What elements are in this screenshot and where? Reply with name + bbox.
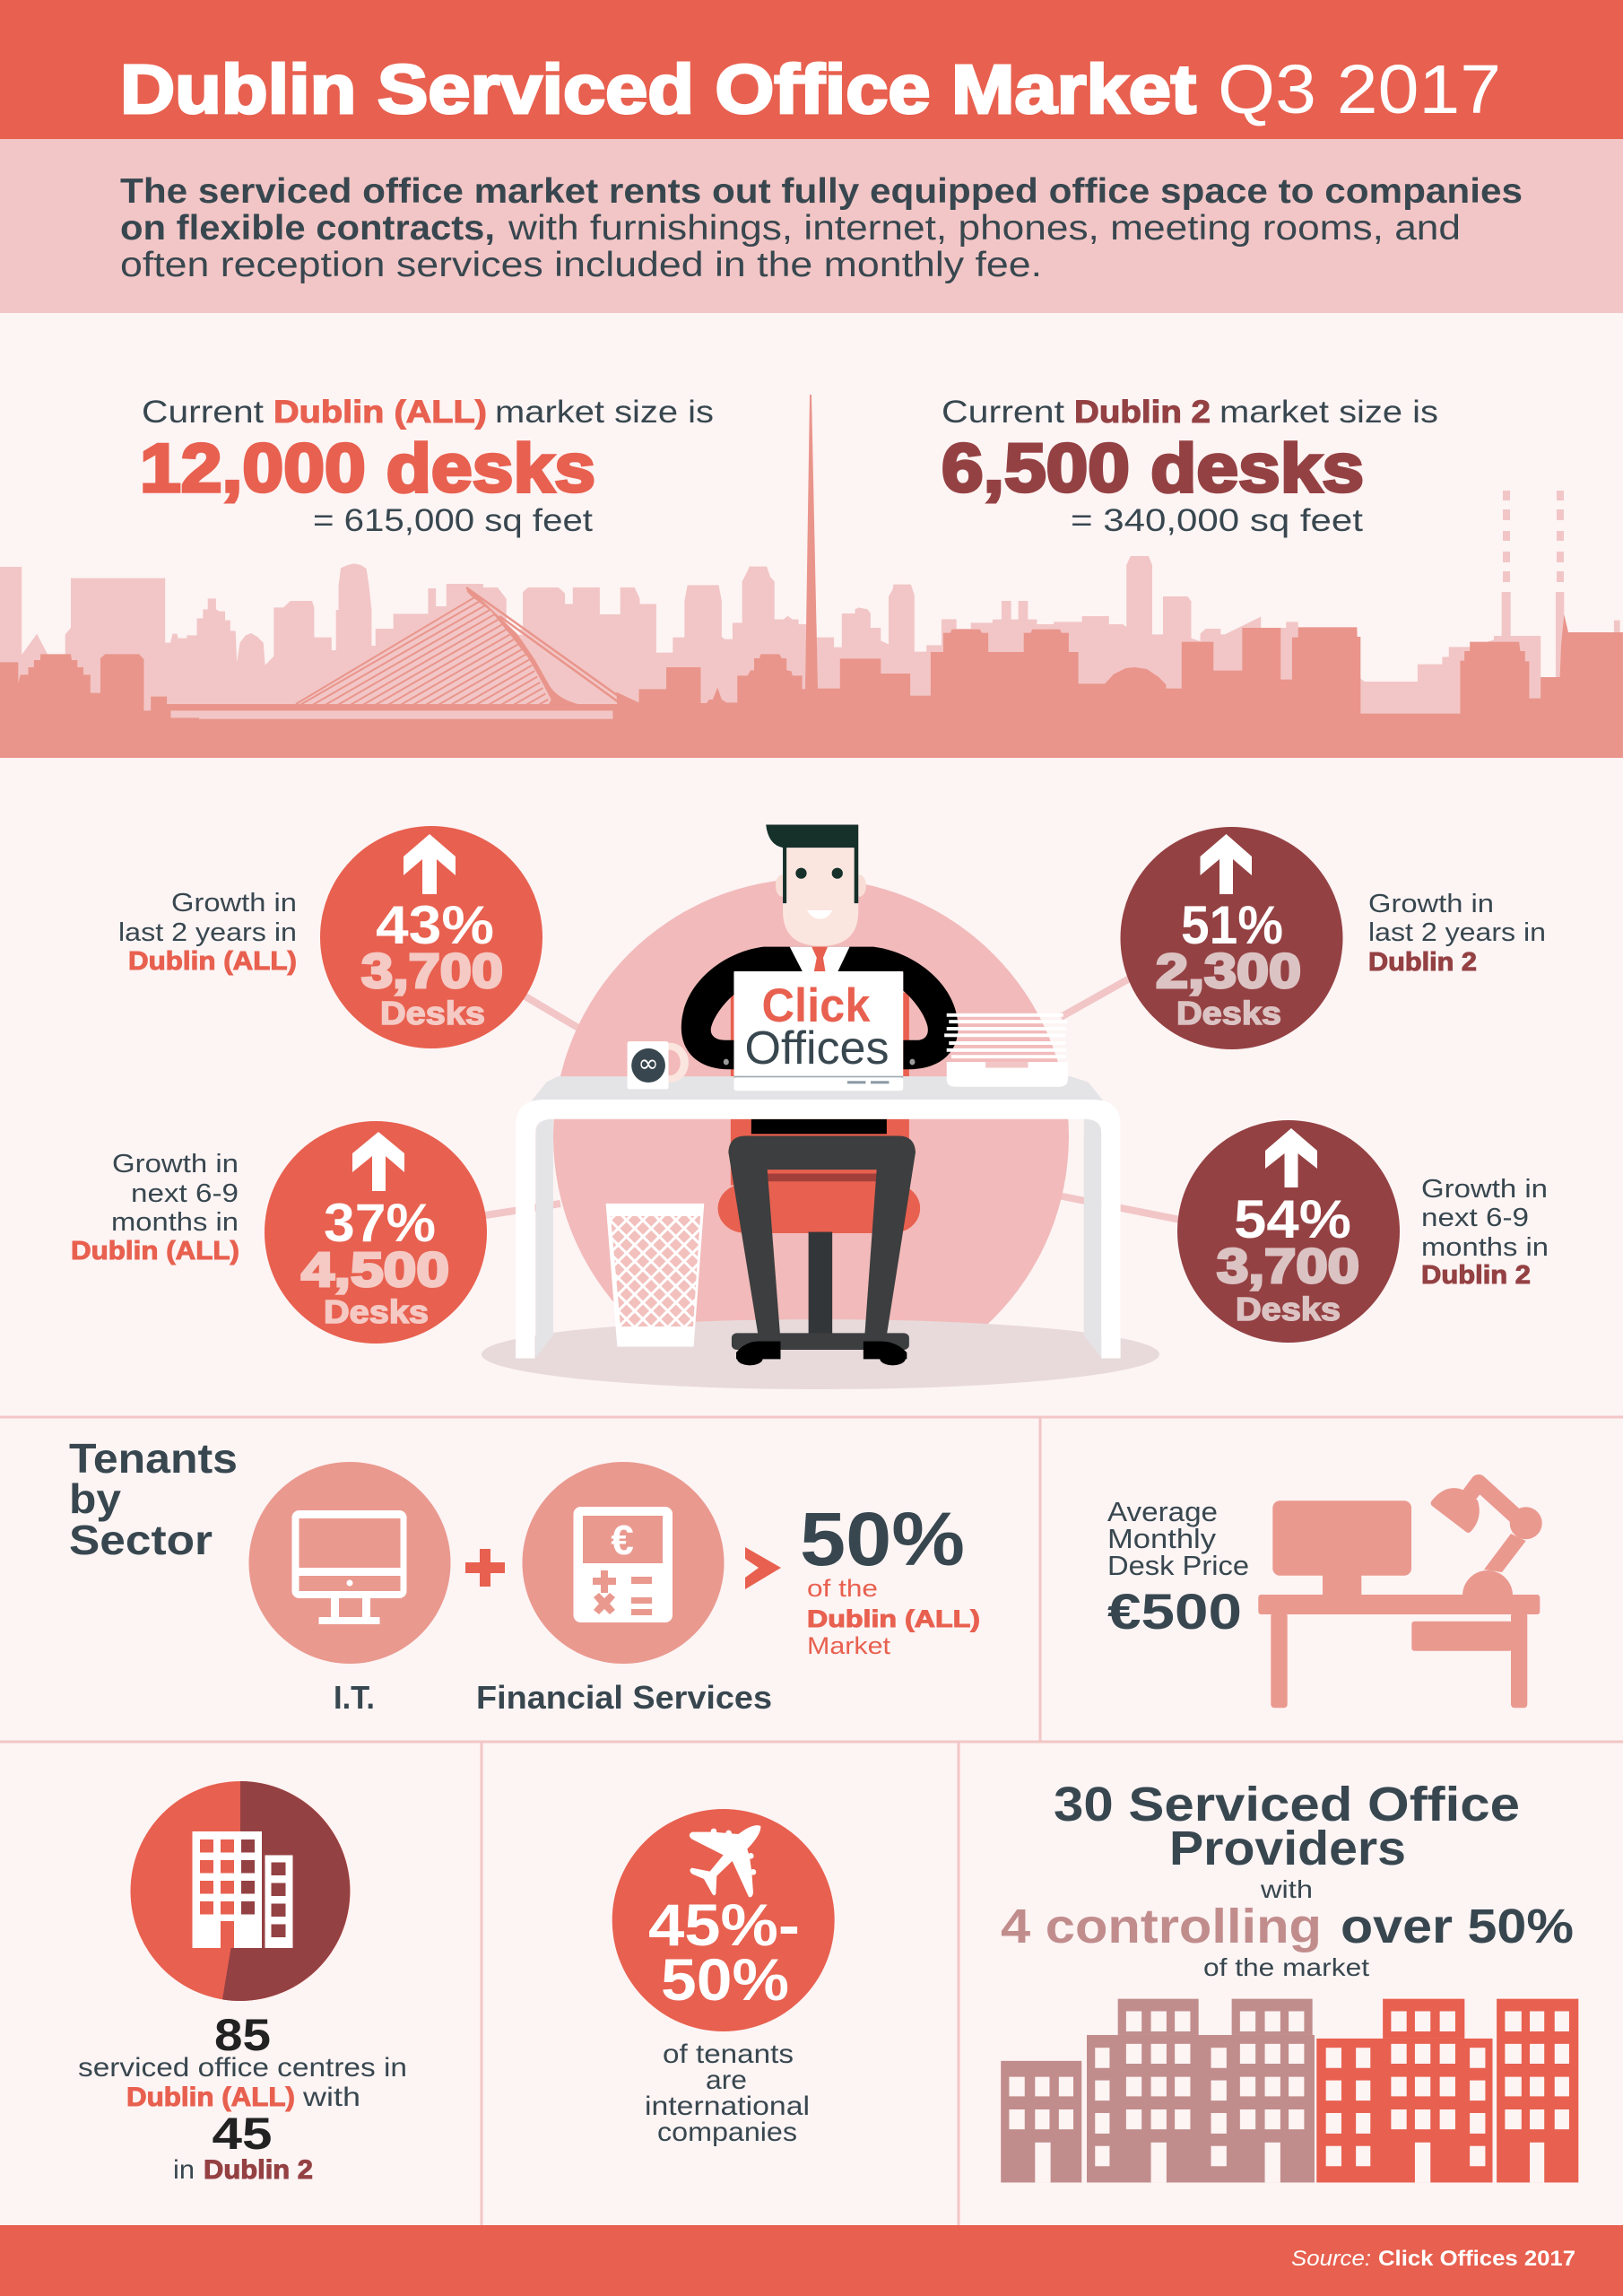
description: companies bbox=[657, 2118, 797, 2147]
stat figures: 54% bbox=[1234, 1189, 1351, 1249]
description: serviced office centres in bbox=[78, 2053, 407, 2083]
stat figures bbox=[301, 1193, 449, 1330]
50% value: 50% bbox=[800, 1497, 965, 1581]
label: growth last 2 years Dublin 2: Dublin 2 bbox=[1368, 948, 1477, 977]
description: with bbox=[302, 2083, 360, 2112]
description: international bbox=[645, 2092, 810, 2121]
market note bbox=[807, 1575, 980, 1659]
sector labels: Financial Services bbox=[476, 1679, 772, 1716]
footer banner bbox=[0, 2225, 1623, 2296]
up arrow bbox=[404, 834, 456, 894]
background circle bbox=[553, 881, 1069, 1324]
market size: Dublin all: Dublin (ALL) bbox=[273, 395, 487, 430]
heading: 30 Serviced Office bbox=[1054, 1778, 1520, 1831]
stat figures: 4,500 bbox=[301, 1243, 449, 1297]
description: Dublin (ALL) bbox=[126, 2083, 295, 2112]
label: growth last 2 years Dublin all: Dublin (ALL) bbox=[128, 947, 297, 976]
connector lines bbox=[480, 976, 1180, 1220]
price label: Desk Price bbox=[1107, 1550, 1249, 1581]
floor shadow bbox=[482, 1319, 1159, 1389]
heading: Tenants bbox=[69, 1435, 238, 1482]
trousers bbox=[728, 1135, 916, 1341]
stat figures bbox=[1156, 895, 1301, 1031]
label: growth last 2 years Dublin 2 bbox=[1368, 890, 1546, 977]
price label: Average bbox=[1107, 1496, 1218, 1527]
up arrow bbox=[352, 1132, 404, 1191]
controlling statement: 4 controlling bbox=[1001, 1900, 1322, 1953]
stat: 43% Dublin all bbox=[320, 826, 542, 1048]
mug bbox=[628, 1041, 684, 1089]
description: of tenants bbox=[663, 2039, 794, 2069]
price label: Monthly bbox=[1107, 1523, 1217, 1554]
description bbox=[78, 2053, 407, 2112]
laptop logo: Click bbox=[762, 979, 871, 1032]
heading: by bbox=[69, 1475, 121, 1522]
percent range: 45%- bbox=[648, 1892, 800, 1958]
stat figures: 37% bbox=[324, 1193, 436, 1253]
chair back bbox=[731, 993, 909, 1186]
stat: 51% Dublin 2 bbox=[1121, 827, 1343, 1049]
paper tray bbox=[944, 1013, 1068, 1087]
description bbox=[645, 2039, 810, 2147]
icon: calculator bbox=[522, 1462, 725, 1664]
market size: Dublin 2: 6,500 desks bbox=[942, 430, 1364, 507]
stat: 54% Dublin 2 bbox=[1177, 1120, 1400, 1343]
label: growth next 6-9 months Dublin all: Dublin (ALL) bbox=[71, 1237, 239, 1265]
intro text bbox=[120, 172, 1523, 284]
label: growth next 6-9 months Dublin 2: Dublin 2 bbox=[1421, 1261, 1531, 1290]
market size: Dublin all: market size is bbox=[495, 395, 714, 430]
market note: Market bbox=[807, 1632, 891, 1659]
windows bbox=[1009, 2011, 1569, 2182]
stat: 37% Dublin all bbox=[265, 1121, 487, 1344]
skyline back layer, west bbox=[0, 563, 682, 735]
of the market: of the market bbox=[1203, 1953, 1369, 1981]
plus sign bbox=[465, 1549, 505, 1587]
skyline front layer, east bbox=[681, 614, 1623, 758]
panel: average desk price bbox=[1107, 1483, 1542, 1708]
up arrow bbox=[1200, 834, 1252, 894]
ears bbox=[776, 874, 866, 897]
grid lines bbox=[0, 1417, 1623, 2225]
market size: Dublin all: 12,000 desks bbox=[140, 430, 595, 507]
label: growth next 6-9 months Dublin all bbox=[71, 1150, 239, 1265]
label: growth next 6-9 months Dublin 2 bbox=[1421, 1175, 1549, 1290]
sector labels: I.T. bbox=[334, 1679, 375, 1716]
market note: of the bbox=[807, 1575, 878, 1602]
pie chart with building bbox=[131, 1781, 350, 2001]
stat figures: 3,700 bbox=[361, 944, 503, 998]
label: growth last 2 years Dublin all bbox=[118, 889, 297, 976]
stat figures: 3,700 bbox=[1217, 1239, 1359, 1293]
description: are bbox=[706, 2066, 747, 2095]
source credit: Click Offices 2017 bbox=[1378, 2247, 1575, 2271]
panel: serviced office centres bbox=[78, 1781, 407, 2185]
controlling statement: over 50% bbox=[1341, 1900, 1574, 1953]
desk frame bbox=[516, 1100, 1121, 1359]
icon: calculator: € bbox=[611, 1517, 634, 1563]
panel: service providers bbox=[1001, 1778, 1578, 2182]
cuffs bbox=[724, 1059, 916, 1065]
bin mesh bbox=[611, 1216, 700, 1326]
skyline back layer, east bbox=[681, 556, 1623, 735]
circle bbox=[612, 1809, 835, 2031]
in Dublin 2: Dublin 2 bbox=[204, 2155, 313, 2185]
heading bbox=[69, 1435, 238, 1563]
laptop bbox=[733, 971, 903, 1091]
smile bbox=[807, 910, 832, 919]
stat figures bbox=[1217, 1189, 1359, 1327]
market note: Dublin (ALL) bbox=[807, 1605, 980, 1632]
mug logo: ∞ bbox=[638, 1048, 659, 1078]
laptop logo bbox=[744, 979, 890, 1074]
label: growth next 6-9 months Dublin 2: months in bbox=[1421, 1233, 1549, 1262]
percent range bbox=[648, 1892, 800, 2013]
market size: Dublin 2: = 340,000 sq feet bbox=[1071, 503, 1363, 538]
label: growth next 6-9 months Dublin all: next 6-9 bbox=[131, 1179, 239, 1208]
label: growth next 6-9 months Dublin all: Growth in bbox=[112, 1150, 239, 1178]
label: growth last 2 years Dublin 2: last 2 years in bbox=[1368, 918, 1546, 947]
shoes bbox=[736, 1341, 907, 1365]
stat figures: Desks bbox=[380, 995, 485, 1031]
price value: €500 bbox=[1107, 1583, 1242, 1639]
stat figures: 51% bbox=[1181, 895, 1283, 955]
suit jacket and arms bbox=[681, 947, 958, 1069]
Samuel Beckett bridge bbox=[296, 587, 619, 705]
with: with bbox=[1260, 1875, 1313, 1903]
office worker at desk illustration bbox=[482, 824, 1159, 1394]
panel: tenants by sector bbox=[69, 1435, 980, 1716]
intro text: The serviced office market rents out fully equipped office space to companies bbox=[120, 172, 1523, 211]
source credit bbox=[1291, 2247, 1575, 2271]
stat figures: Desks bbox=[1176, 995, 1281, 1031]
desk top surface bbox=[528, 1076, 1107, 1106]
shirt bbox=[790, 947, 850, 971]
coral buildings: other providers bbox=[1316, 1999, 1578, 2182]
stat figures bbox=[361, 895, 503, 1031]
source credit: Source: bbox=[1291, 2247, 1371, 2271]
laptop logo: Offices bbox=[744, 1022, 890, 1074]
greater-than sign bbox=[745, 1547, 781, 1589]
title: Q3 2017 bbox=[1218, 51, 1501, 128]
label: growth next 6-9 months Dublin 2: Growth in bbox=[1421, 1175, 1548, 1204]
label: growth next 6-9 months Dublin all: months in bbox=[111, 1208, 239, 1237]
market size: Dublin 2: market size is bbox=[1219, 395, 1438, 430]
panel: international tenants bbox=[612, 1809, 835, 2147]
icon: computer bbox=[249, 1462, 450, 1664]
title: Dublin Serviced Office Market bbox=[120, 51, 1196, 128]
face bbox=[783, 848, 858, 946]
intro text: with furnishings, internet, phones, meeting rooms, and bbox=[508, 209, 1461, 248]
intro text: often reception services included in the monthly fee. bbox=[120, 246, 1042, 284]
header banner bbox=[0, 0, 1623, 139]
skyline front layer, west bbox=[0, 654, 682, 758]
market size: Dublin all: = 615,000 sq feet bbox=[313, 503, 593, 538]
intro band bbox=[0, 139, 1623, 313]
Dublin skyline illustration bbox=[0, 395, 1623, 758]
market size: Dublin all: Current bbox=[142, 395, 264, 430]
Spire of Dublin bbox=[805, 395, 818, 689]
chimney stacks bbox=[1503, 491, 1564, 582]
stat figures: Desks bbox=[1236, 1291, 1341, 1327]
heading: Providers bbox=[1169, 1822, 1406, 1875]
waste bin bbox=[606, 1204, 704, 1347]
chair seat bbox=[718, 1170, 920, 1233]
label: growth next 6-9 months Dublin 2: next 6-9 bbox=[1421, 1204, 1529, 1232]
belt bbox=[751, 1119, 887, 1134]
label: growth last 2 years Dublin all: last 2 years in bbox=[118, 918, 297, 947]
heading bbox=[1054, 1778, 1520, 1875]
stat figures: 43% bbox=[376, 895, 494, 955]
85: 85 bbox=[214, 2010, 271, 2060]
stat figures: 2,300 bbox=[1156, 944, 1301, 998]
rose buildings: four providers bbox=[1001, 1999, 1315, 2182]
intro text: on flexible contracts, bbox=[120, 209, 495, 248]
label: growth last 2 years Dublin 2: Growth in bbox=[1368, 890, 1494, 918]
45: 45 bbox=[212, 2109, 273, 2159]
stat figures: Desks bbox=[324, 1293, 429, 1330]
in Dublin 2: in bbox=[173, 2155, 195, 2185]
person and desk drawing bbox=[516, 824, 1121, 1365]
up arrow bbox=[1265, 1128, 1317, 1187]
label: growth last 2 years Dublin all: Growth in bbox=[171, 889, 297, 918]
chair post and base bbox=[732, 1232, 909, 1350]
market size: Dublin 2: Current bbox=[942, 395, 1064, 430]
percent range: 50% bbox=[661, 1946, 789, 2013]
hair bbox=[766, 824, 858, 903]
tie bbox=[812, 947, 828, 971]
buildings illustration bbox=[1001, 1999, 1578, 2182]
eyes bbox=[795, 868, 843, 879]
heading: Sector bbox=[69, 1517, 213, 1563]
sector labels bbox=[334, 1679, 772, 1716]
market size: Dublin 2: Dublin 2 bbox=[1074, 395, 1211, 430]
price label bbox=[1107, 1496, 1249, 1581]
market size: Dublin 2 bbox=[942, 395, 1438, 538]
market size: Dublin all bbox=[140, 395, 714, 538]
icon: airplane bbox=[690, 1825, 760, 1897]
controlling statement bbox=[1001, 1900, 1574, 1953]
icon: desk with monitor and lamp bbox=[1258, 1483, 1542, 1708]
